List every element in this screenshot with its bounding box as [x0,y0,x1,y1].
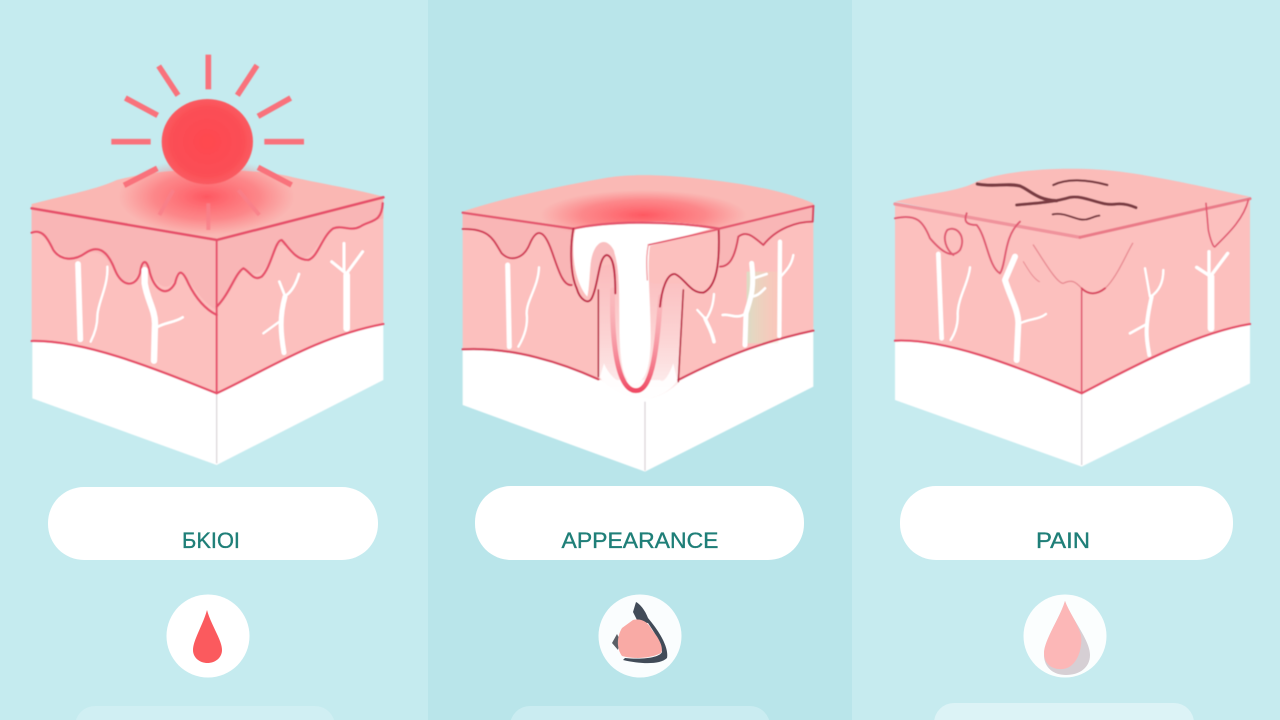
ulcer pocket [598,263,683,399]
faded rays on skin [159,190,259,230]
heat glow [118,158,295,235]
background panel 1 [0,0,428,720]
illustration: skin cube with ulcer [463,175,813,472]
skin outlines [463,206,813,382]
cube top surface [895,169,1250,238]
skin outlines [895,199,1250,393]
label pill: panel 1: БKIOI [182,528,240,553]
label pill: panel 2: APPEARANCE [562,528,718,553]
cube dermis faces [32,197,383,393]
inflammation glow [540,190,747,240]
label pill: panel 1 [48,487,378,560]
background panel 2 [428,0,852,720]
faint bottom pills [75,703,1194,720]
background panel 3 [852,0,1280,720]
label pill: panel 3 [900,486,1233,560]
cube dermis faces [895,198,1250,393]
cube white base [32,320,383,465]
wrinkle lines [977,180,1136,220]
icon: red drop [166,594,250,678]
ulcer bottom rim [613,290,661,391]
green bruise patch [747,272,778,343]
cube white base [463,327,813,472]
cube dermis faces [463,205,813,380]
cube top surface [32,170,383,240]
cube white base [895,322,1250,467]
ulcer white crater [573,222,716,383]
cube top surface [463,175,813,229]
vessels [508,242,793,347]
sun rays [111,55,304,185]
label pill: panel 3: PAIN [1036,528,1090,553]
sun disc [162,99,253,184]
illustration: skin cube with sun [32,55,383,465]
vessels [78,243,363,361]
inner pink shading [591,242,617,290]
icon: pale drop [1024,594,1106,678]
illustration: skin cube with pain wrinkles [895,169,1250,467]
skin outlines [32,197,383,393]
icon: pink blob [598,594,682,678]
label pill: panel 2 [475,486,804,560]
vessels [938,252,1228,360]
